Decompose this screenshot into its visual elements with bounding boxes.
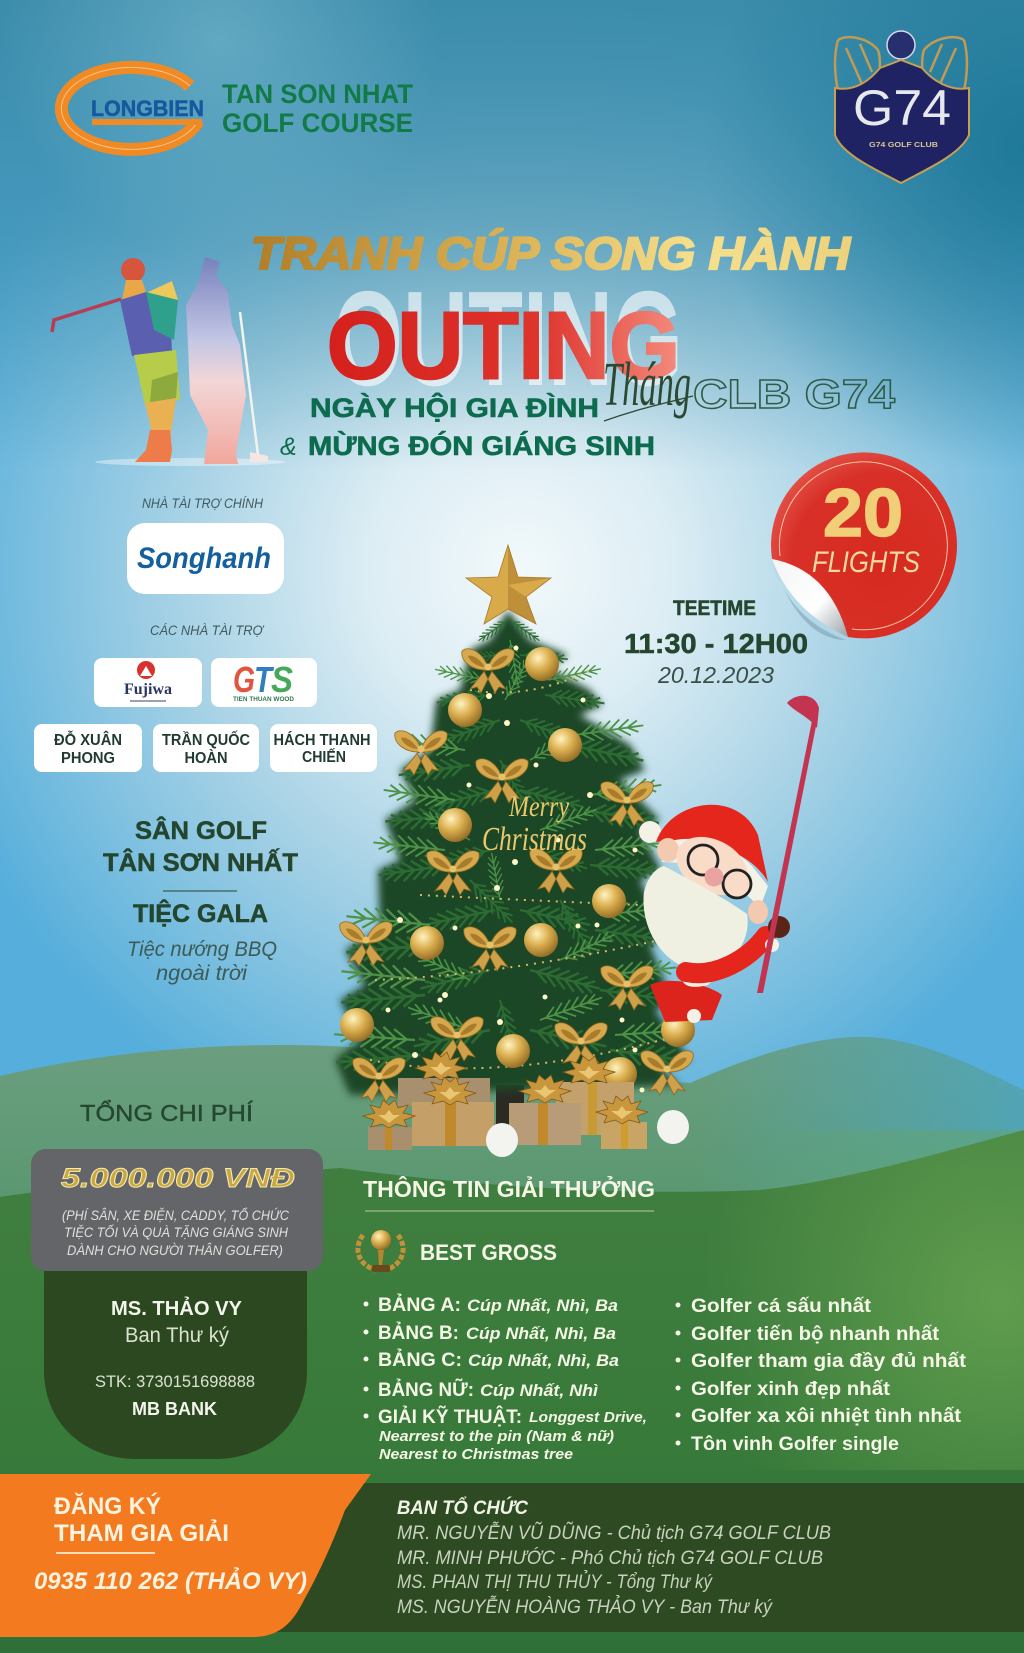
icon: gold trophy: [358, 1230, 403, 1272]
sponsor card: Hach Thanh Chien: HÁCH THANH: [274, 732, 370, 749]
teetime: 20.12.2023: [657, 662, 774, 688]
panel: contact: MS. THẢO VY: [111, 1297, 243, 1320]
teetime: [624, 597, 808, 688]
venue text: TIỆC GALA: [133, 898, 268, 928]
venue text: Tiệc nướng BBQ: [127, 938, 277, 961]
list: prize groups: GIẢI KỸ THUẬT:: [378, 1406, 522, 1428]
logo: G74 golf club shield: G74: [853, 80, 951, 136]
list: special awards: Golfer xinh đẹp nhất: [691, 1379, 891, 1400]
panel: contact: [44, 1265, 307, 1459]
subtitle: Ngay hoi gia dinh: MỪNG ĐÓN GIÁNG SINH: [308, 430, 655, 461]
background hills and golf field: [0, 1037, 1024, 1653]
venue text: [103, 815, 298, 985]
logo: G74 golf club shield: G74 GOLF CLUB: [869, 142, 938, 149]
venue text: TÂN SƠN NHẤT: [103, 847, 298, 877]
panel: organising committee: BAN TỔ CHỨC: [397, 1497, 528, 1519]
list: prize groups: Nearrest to the pin (Nam & nữ): [379, 1428, 614, 1445]
panel: contact: STK: 3730151698888: [95, 1372, 255, 1391]
label: sponsors: CÁC NHÀ TÀI TRỢ: [150, 623, 265, 638]
sponsor card: Tran Quoc Hoan: [153, 724, 259, 772]
list: special awards: [676, 1296, 967, 1455]
panel: registration: ĐĂNG KÝ: [54, 1492, 161, 1520]
list: prize groups: Cúp Nhất, Nhì, Ba: [467, 1297, 618, 1315]
badge: 20 flights: [771, 452, 957, 640]
logo card: Songhanh: [127, 523, 284, 594]
title: Outing: OUTING: [333, 263, 683, 414]
tree star: [466, 545, 551, 624]
text: merry christmas: [482, 790, 587, 858]
tree branches: [335, 616, 692, 1073]
list: prize groups: BẢNG C:: [378, 1349, 462, 1371]
panel: organising committee: MR. NGUYỄN VŨ DŨNG - Chủ tịch G74 GOLF CLUB: [397, 1522, 831, 1544]
label: main sponsor: NHÀ TÀI TRỢ CHÍNH: [142, 496, 263, 511]
subtitle: Ngay hoi gia dinh: NGÀY HỘI GIA ĐÌNH: [310, 392, 599, 423]
panel: organising committee: [250, 1483, 1024, 1632]
tree ornaments: gold bows: [340, 649, 693, 1102]
tree lights: [386, 646, 644, 1092]
subtitle: Ngay hoi gia dinh: [280, 392, 655, 461]
list: special awards: Golfer xa xôi nhiệt tình nhất: [691, 1406, 962, 1427]
subtitle: Ngay hoi gia dinh: &: [280, 433, 297, 461]
list: special awards: Golfer tham gia đầy đủ nhất: [691, 1351, 967, 1372]
list: prize groups: BẢNG B:: [378, 1322, 459, 1344]
sponsor card: Do Xuan Phong: ĐỖ XUÂN: [54, 731, 122, 749]
logo card: Tien Thuan Wood: T: [254, 659, 274, 700]
tree ornaments: gold balls: [340, 647, 695, 1091]
text: merry christmas: Merry: [508, 790, 570, 823]
title: Tranh cup Song Hanh: TRANH CÚP SONG HÀNH: [251, 228, 852, 279]
panel: registration: THAM GIA GIẢI: [54, 1518, 229, 1547]
logo: Long Bien Tan Son Nhat Golf Course: GOLF COURSE: [222, 108, 413, 138]
logo: Long Bien Tan Son Nhat Golf Course: [61, 67, 413, 149]
tree garlands: [370, 670, 680, 1068]
list: prize groups: BẢNG NỮ:: [378, 1379, 474, 1401]
panel: organising committee: MS. NGUYỄN HOÀNG THẢO VY - Ban Thư ký: [397, 1596, 773, 1618]
subtitle: Thang CLB G74: [603, 351, 895, 421]
list: prize groups: [364, 1294, 647, 1463]
logo card: Fujiwa: Fujiwa: [124, 681, 172, 698]
panel: organising committee: MR. MINH PHƯỚC - Phó Chủ tịch G74 GOLF CLUB: [397, 1547, 823, 1569]
sponsor card: Hach Thanh Chien: [270, 724, 377, 772]
panel: price: [31, 1149, 323, 1271]
teetime: TEETIME: [673, 597, 756, 620]
logo card: Tien Thuan Wood: S: [271, 659, 293, 700]
panel: organising committee: MS. PHAN THỊ THU THỦY - Tổng Thư ký: [397, 1571, 713, 1593]
panel: price: 5.000.000 VNĐ: [61, 1163, 295, 1193]
venue text: ngoài trời: [156, 962, 248, 985]
logo card: Songhanh: Songhanh: [137, 542, 271, 575]
logo: Long Bien Tan Son Nhat Golf Course: LONGBIEN: [91, 96, 204, 121]
list: prize groups: Cúp Nhất, Nhì: [480, 1382, 598, 1400]
list: special awards: Tôn vinh Golfer single: [691, 1434, 899, 1455]
title: Outing: [327, 263, 683, 414]
list: special awards: Golfer cá sấu nhất: [691, 1296, 872, 1317]
list: special awards: Golfer tiến bộ nhanh nhất: [691, 1324, 940, 1345]
sponsor card: Do Xuan Phong: [34, 724, 142, 772]
heading: best gross: BEST GROSS: [420, 1240, 557, 1265]
logo card: Tien Thuan Wood: G: [233, 659, 255, 700]
heading: total cost: TỔNG CHI PHÍ: [80, 1099, 254, 1126]
subtitle: Thang CLB G74: CLB G74: [693, 371, 895, 417]
tree highlight needles: [333, 639, 691, 1051]
logo: G74 golf club shield: [835, 31, 969, 183]
list: prize groups: Nearest to Christmas tree: [379, 1446, 573, 1463]
badge: 20 flights: 20: [823, 475, 903, 551]
panel: registration: [0, 1474, 371, 1637]
badge: 20 flights: FLIGHTS: [812, 546, 920, 579]
heading: prize information: THÔNG TIN GIẢI THƯỞNG: [363, 1174, 655, 1202]
panel: contact: MB BANK: [132, 1399, 217, 1419]
illustration: santa with golf club: [639, 696, 819, 1023]
sponsor card: Hach Thanh Chien: CHIẾN: [302, 749, 346, 766]
list: prize groups: Cúp Nhất, Nhì, Ba: [466, 1325, 616, 1343]
panel: registration: 0935 110 262 (THẢO VY): [34, 1567, 307, 1595]
venue text: SÂN GOLF: [135, 815, 267, 845]
sponsor card: Tran Quoc Hoan: TRẦN QUỐC: [162, 731, 250, 749]
logo card: Tien Thuan Wood: TIEN THUAN WOOD: [233, 696, 294, 703]
illustration: golf balls: [486, 1110, 689, 1157]
illustration: polygon golfers: [52, 257, 285, 466]
logo: Long Bien Tan Son Nhat Golf Course: TAN SON NHAT: [222, 79, 413, 109]
illustration: gift boxes: [363, 1052, 648, 1150]
panel: price: (PHÍ SÂN, XE ĐIỆN, CADDY, TỔ CHỨC: [62, 1208, 289, 1223]
panel: price: DÀNH CHO NGƯỜI THÂN GOLFER): [67, 1243, 283, 1258]
sponsor card: Tran Quoc Hoan: HOÀN: [184, 750, 228, 767]
logo card: Fujiwa: [94, 658, 202, 707]
list: prize groups: Cúp Nhất, Nhì, Ba: [468, 1352, 619, 1370]
list: prize groups: Longgest Drive,: [529, 1409, 647, 1426]
panel: contact: Ban Thư ký: [125, 1324, 229, 1347]
panel: price: TIỆC TỐI VÀ QUÀ TẶNG GIÁNG SINH: [64, 1225, 288, 1240]
subtitle: Thang CLB G74: Tháng: [603, 351, 691, 419]
teetime: 11:30 - 12H00: [624, 628, 808, 659]
title: Outing: OUTING: [327, 293, 680, 399]
sponsor card: Do Xuan Phong: PHONG: [61, 750, 115, 767]
logo card: Tien Thuan Wood: [211, 658, 317, 707]
list: prize groups: BẢNG A:: [378, 1294, 461, 1316]
illustration: christmas tree: [333, 545, 695, 1135]
text: merry christmas: Christmas: [482, 821, 587, 858]
